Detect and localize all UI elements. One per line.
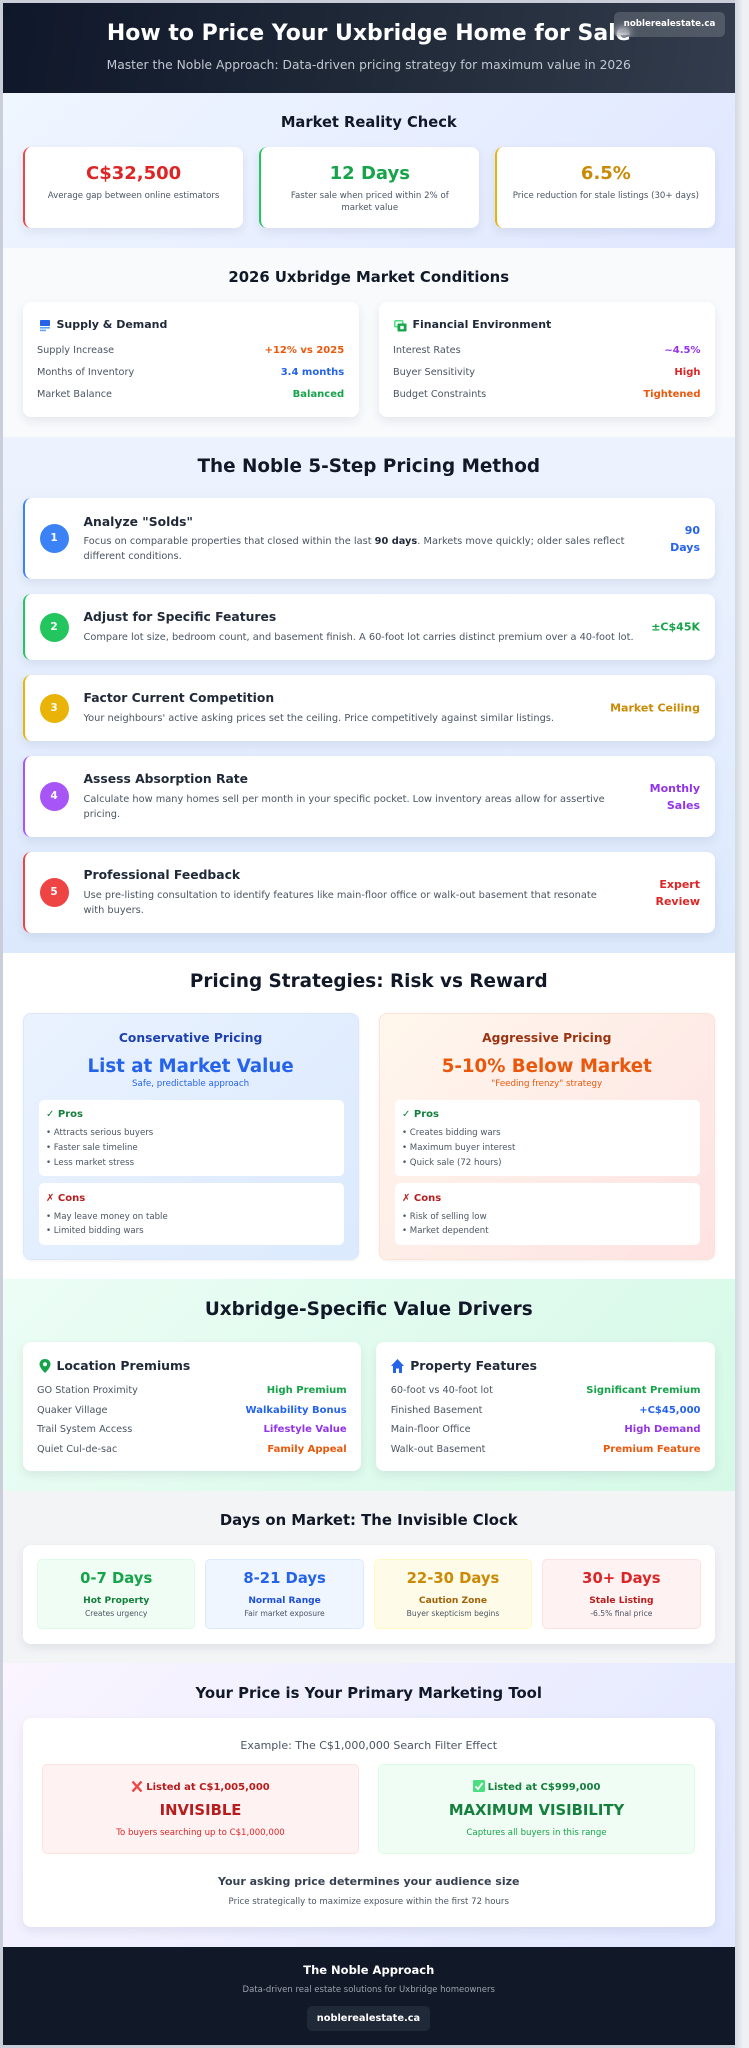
step number: 1	[50, 532, 58, 544]
cons box	[39, 1183, 344, 1245]
step number: 4	[50, 790, 58, 802]
panel: location premiums	[22, 1342, 361, 1471]
row: cul-de-sac: Quiet Cul-de-sac	[37, 1444, 117, 1455]
section: five-step method	[2, 437, 735, 953]
step tag: ±C$45K	[651, 620, 700, 634]
stat card: estimator gap: Average gap between online estimators	[48, 191, 219, 201]
takeaway: Your asking price determines your audience size	[218, 1875, 519, 1888]
footer tagline: Data-driven real estate solutions for Uxbridge homeowners	[243, 1985, 495, 1995]
step number	[40, 524, 68, 553]
row: lot size: 60-foot vs 40-foot lot	[391, 1385, 493, 1396]
step description: Compare lot size, bedroom count, and basement finish. A 60-foot lot carries distinct premium over a 40-foot lot.	[84, 632, 634, 642]
footer website pill: noblerealestate.ca	[317, 2013, 420, 2024]
row: market balance	[37, 389, 344, 400]
step title: Adjust for Specific Features	[84, 610, 276, 624]
row: Quaker Village	[37, 1404, 347, 1416]
stage: caution zone	[374, 1559, 532, 1629]
row: GO station	[37, 1385, 347, 1396]
stat card: price reduction: 6.5%	[581, 162, 631, 184]
cons box: • Risk of selling low	[402, 1212, 487, 1222]
stage: stale listing: -6.5% final price	[590, 1609, 652, 1618]
strategy headline: List at Market Value	[88, 1056, 294, 1077]
section: marketing tool	[2, 1663, 735, 1947]
section: market reality check	[2, 93, 735, 248]
cons box: • Market dependent	[402, 1226, 489, 1236]
stage: normal range	[205, 1559, 364, 1629]
row: months of inventory: 3.4 months	[281, 367, 344, 378]
step description	[84, 794, 605, 820]
cons box: • Limited bidding wars	[46, 1226, 144, 1236]
row: walk-out basement: Premium Feature	[603, 1444, 700, 1455]
step 3	[22, 675, 715, 741]
step tag: Market Ceiling	[610, 702, 700, 714]
box: invisible listing	[42, 1764, 359, 1854]
step tag: Expert	[659, 878, 700, 890]
step 4	[22, 756, 715, 837]
step number: 3	[50, 702, 58, 714]
step number	[40, 612, 68, 642]
step description: Calculate how many homes sell per month in your specific pocket. Low inventory areas allow for assertive	[84, 794, 605, 805]
heading: 2026 Uxbridge Market Conditions	[228, 268, 509, 286]
step 1	[22, 498, 715, 579]
step number	[40, 694, 68, 722]
step number	[40, 782, 68, 811]
row: trail system	[36, 1424, 347, 1435]
pros box: ✓ Pros	[46, 1109, 83, 1120]
outcome: INVISIBLE	[160, 1802, 241, 1819]
listing price: Listed at C$999,000	[488, 1782, 600, 1793]
pros box: • Faster sale timeline	[46, 1143, 138, 1153]
strategy name: Aggressive Pricing	[482, 1031, 611, 1045]
strategy note: "Feeding frenzy" strategy	[491, 1079, 602, 1089]
title: How to Price Your Uxbridge Home for Sale	[107, 21, 631, 46]
row: supply increase	[37, 345, 344, 356]
step number: 5	[50, 886, 58, 898]
strategy note: Safe, predictable approach	[132, 1079, 249, 1089]
row: main-floor office	[391, 1424, 700, 1435]
row: Quaker Village: Quaker Village	[37, 1404, 108, 1416]
stage: caution zone: Buyer skepticism begins	[407, 1609, 499, 1618]
row: buyer sensitivity: Buyer Sensitivity	[393, 367, 475, 378]
step title: Factor Current Competition	[84, 691, 274, 705]
card title: Supply & Demand	[56, 318, 167, 331]
stat card: estimator gap	[22, 147, 243, 228]
cons box	[395, 1183, 700, 1245]
tip: Price strategically to maximize exposure within the first 72 hours	[229, 1897, 509, 1907]
icon: money	[394, 320, 406, 332]
row: main-floor office: Main-floor Office	[391, 1424, 471, 1435]
stat card: price reduction: Price reduction for stale listings (30+ days)	[513, 191, 699, 201]
step tag: Review	[656, 894, 700, 908]
step title: Professional Feedback	[84, 868, 240, 882]
step description: pricing.	[84, 808, 120, 820]
section: value drivers	[2, 1279, 735, 1491]
stat card: estimator gap: C$32,500	[86, 162, 181, 184]
row: main-floor office: High Demand	[624, 1424, 700, 1435]
icon: supply	[40, 320, 50, 332]
stat card: price reduction	[495, 147, 715, 228]
footer	[2, 1947, 735, 2045]
outcome: MAXIMUM VISIBILITY	[449, 1802, 624, 1819]
stage: caution zone: Caution Zone	[419, 1596, 487, 1606]
row: supply increase: Supply Increase	[37, 345, 114, 356]
website badge	[614, 12, 725, 37]
cons box: ✗ Cons	[46, 1193, 85, 1204]
cons box: • May leave money on table	[46, 1212, 168, 1222]
heading: Market Reality Check	[281, 114, 457, 131]
row: budget constraints	[393, 389, 700, 400]
row: interest rates	[393, 345, 700, 356]
step description: Use pre-listing consultation to identify features like main-floor office or walk-out basement that resonate	[84, 890, 597, 901]
heading: Your Price is Your Primary Marketing Tool	[196, 1684, 542, 1702]
strategy name: Conservative Pricing	[119, 1031, 262, 1045]
panel: aggressive pricing	[378, 1013, 715, 1260]
stage: hot property: Hot Property	[83, 1596, 149, 1606]
row: finished basement: Finished Basement	[391, 1404, 482, 1416]
heading: The Noble 5-Step Pricing Method	[197, 456, 540, 477]
stage: caution zone: 22-30 Days	[407, 1570, 499, 1587]
stat card: faster sale: Faster sale when priced within 2% of	[291, 191, 449, 201]
step tag: Sales	[667, 798, 700, 812]
stage: normal range: Normal Range	[248, 1596, 321, 1606]
stage: stale listing	[542, 1559, 701, 1629]
stage: stale listing: 30+ Days	[582, 1570, 661, 1587]
note: To buyers searching up to C$1,000,000	[116, 1828, 285, 1838]
row: finished basement: +C$45,000	[639, 1404, 700, 1416]
step tag	[656, 878, 700, 908]
stat card: faster sale: 12 Days	[330, 162, 410, 184]
header banner	[2, 3, 735, 93]
step 2	[22, 594, 715, 660]
stage: normal range: 8-21 Days	[243, 1570, 326, 1587]
row: trail system: Trail System Access	[37, 1424, 132, 1435]
row: lot size	[391, 1385, 700, 1396]
row: GO station: GO Station Proximity	[37, 1385, 138, 1396]
stat card: faster sale	[259, 147, 479, 228]
panel: search filter example	[22, 1718, 715, 1927]
stage: stale listing: Stale Listing	[589, 1596, 654, 1606]
section: days on market	[2, 1491, 735, 1663]
row: walk-out basement	[391, 1444, 700, 1455]
step tag	[650, 782, 700, 812]
note: Captures all buyers in this range	[466, 1828, 607, 1838]
card title: Property Features	[410, 1358, 537, 1373]
section: market conditions	[2, 248, 735, 437]
step description	[84, 536, 624, 562]
heading: Days on Market: The Invisible Clock	[220, 1511, 518, 1529]
subtitle: Master the Noble Approach: Data-driven pricing strategy for maximum value in 2026	[107, 58, 631, 72]
pros box: ✓ Pros	[402, 1109, 439, 1120]
box: visible listing	[378, 1764, 695, 1854]
row: interest rates: ~4.5%	[664, 345, 700, 356]
row: Quaker Village: Walkability Bonus	[246, 1404, 347, 1416]
row: cul-de-sac	[37, 1444, 347, 1455]
heading: Uxbridge-Specific Value Drivers	[205, 1299, 533, 1320]
website badge: noblerealestate.ca	[624, 19, 715, 29]
row: buyer sensitivity: High	[674, 367, 700, 378]
row: months of inventory	[37, 367, 344, 378]
row: trail system: Lifestyle Value	[264, 1424, 347, 1435]
panel: timeline	[22, 1545, 715, 1644]
step tag	[670, 524, 700, 554]
step description: with buyers.	[84, 904, 144, 916]
step description	[84, 890, 597, 916]
step number: 2	[50, 620, 58, 632]
stage: normal range: Fair market exposure	[244, 1609, 325, 1618]
footer website pill	[307, 2006, 430, 2031]
row: market balance: Market Balance	[37, 389, 112, 400]
section: pricing strategies	[2, 953, 735, 1279]
row: months of inventory: Months of Inventory	[37, 367, 134, 378]
row: GO station: High Premium	[267, 1385, 347, 1396]
row: lot size: Significant Premium	[586, 1385, 700, 1396]
pros box: • Less market stress	[46, 1158, 134, 1168]
strategy headline: 5-10% Below Market	[442, 1056, 652, 1077]
row: interest rates: Interest Rates	[393, 345, 461, 356]
step title: Analyze "Solds"	[84, 515, 193, 529]
panel: conservative pricing	[22, 1013, 359, 1260]
cons box: ✗ Cons	[402, 1193, 441, 1204]
row: budget constraints: Tightened	[643, 389, 700, 400]
panel: supply and demand	[22, 302, 359, 417]
step description: Your neighbours' active asking prices set the ceiling. Price competitively against similar listings.	[84, 712, 554, 724]
pros box	[39, 1100, 344, 1176]
row: finished basement	[391, 1404, 700, 1416]
example caption: Example: The C$1,000,000 Search Filter Effect	[240, 1739, 497, 1752]
card title: Financial Environment	[412, 318, 551, 331]
step tag: 90	[685, 524, 700, 536]
step tag: Monthly	[650, 782, 700, 794]
step tag: Days	[670, 540, 700, 554]
panel: property features	[376, 1342, 715, 1471]
icon: house	[391, 1359, 404, 1373]
row: cul-de-sac: Family Appeal	[267, 1444, 347, 1455]
pros box: • Attracts serious buyers	[46, 1128, 153, 1138]
row: budget constraints: Budget Constraints	[393, 389, 486, 400]
card title: Location Premiums	[56, 1358, 190, 1373]
row: buyer sensitivity	[393, 367, 700, 378]
stage: hot property	[37, 1559, 195, 1629]
pros box: • Quick sale (72 hours)	[402, 1158, 502, 1168]
heading: Pricing Strategies: Risk vs Reward	[190, 971, 548, 992]
row: walk-out basement: Walk-out Basement	[391, 1444, 485, 1455]
pros box: • Creates bidding wars	[402, 1128, 501, 1138]
stage: hot property: Creates urgency	[85, 1609, 147, 1618]
step description: different conditions.	[84, 550, 182, 562]
icon: map pin	[40, 1359, 50, 1373]
stat card: faster sale: market value	[341, 203, 398, 213]
step title: Assess Absorption Rate	[84, 772, 248, 786]
listing price: Listed at C$1,005,000	[146, 1782, 270, 1793]
panel: financial environment	[378, 302, 715, 417]
step number	[40, 878, 68, 907]
pros box	[395, 1100, 700, 1176]
pros box: • Maximum buyer interest	[402, 1143, 515, 1153]
footer title: The Noble Approach	[303, 1963, 434, 1977]
stage: hot property: 0-7 Days	[80, 1570, 152, 1587]
step 5	[22, 852, 715, 933]
row: supply increase: +12% vs 2025	[265, 345, 344, 356]
row: market balance: Balanced	[293, 389, 344, 400]
step description: Focus on comparable properties that closed within the last 90 days. Markets move quickly; older sales reflect	[84, 536, 624, 547]
